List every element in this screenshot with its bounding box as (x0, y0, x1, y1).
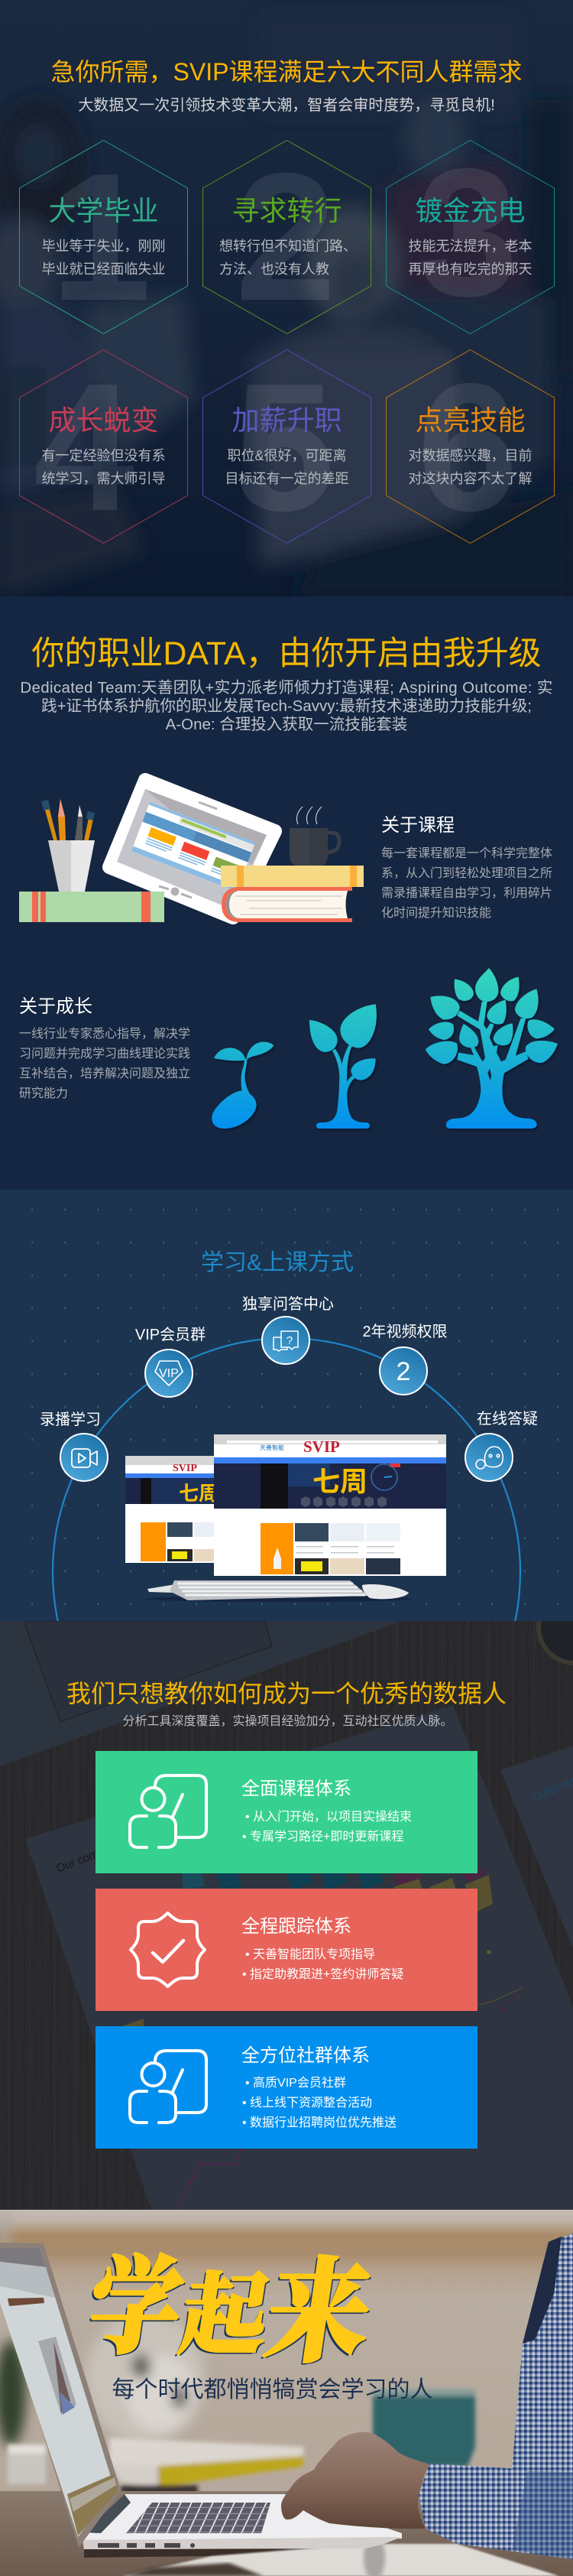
hexagon description (408, 239, 532, 277)
hexagon: career change (202, 140, 371, 334)
card: curriculum (96, 1751, 478, 1873)
card bullets (242, 1947, 403, 1981)
hexagon description: 对数据感兴趣，目前 (408, 448, 532, 463)
hexagon: graduate (19, 140, 188, 334)
card bullets (242, 2076, 397, 2129)
icon: front browser window: SVIP (303, 1437, 340, 1456)
hexagon description: 对这块内容不太了解 (408, 471, 532, 486)
icon: Q and A: ? (286, 1334, 293, 1347)
hexagon description (225, 448, 348, 486)
icon: front browser window: 七周 (312, 1466, 367, 1497)
ghost numbers 1-6: 3 (417, 132, 518, 334)
icon: VIP diamond (145, 1350, 193, 1397)
hexagon: growth (19, 349, 188, 544)
label: Q and A center: 独享问答中心 (242, 1296, 334, 1313)
heading: 学习&上课方式 (201, 1250, 354, 1275)
icon: back browser window: 七周 (179, 1482, 219, 1505)
hexagon: upskilling (386, 140, 555, 334)
hexagon title: 大学毕业 (48, 195, 159, 226)
hexagon description: 再厚也有吃完的那天 (408, 261, 532, 277)
hexagon description (219, 239, 357, 277)
icon: teacher at board (128, 2049, 208, 2124)
brush title (82, 2250, 379, 2376)
icon: teacher at board (128, 1774, 208, 1849)
card bullets: • 从入门开始，以项目实操结束 (245, 1811, 412, 1824)
brush title: 来 (259, 2251, 379, 2376)
icon: two years (380, 1347, 427, 1395)
card bullets: • 天善智能团队专项指导 (245, 1948, 375, 1961)
panel: career data (0, 596, 573, 1190)
heading: 我们只想教你如何成为一个优秀的数据人 (66, 1680, 507, 1707)
label: about course: 关于课程 (381, 815, 455, 836)
hexagon description: 毕业等于失业，刚刚 (41, 239, 165, 254)
dotted background and arc (31, 1208, 558, 1621)
icon: front browser window (214, 1434, 446, 1576)
hexagon title: 成长蜕变 (48, 404, 159, 436)
hexagon title: 镀金充电 (415, 195, 526, 226)
hand (281, 2432, 429, 2529)
card bullets: • 专属学习路径+即时更新课程 (242, 1830, 403, 1843)
brush title: 起 (174, 2268, 275, 2366)
ghost numbers 1-6: 6 (417, 346, 518, 549)
chart: browser mockups with keyboard (125, 1434, 446, 1602)
hexagon title: 加薪升职 (231, 404, 342, 436)
card: community (96, 2026, 478, 2149)
icon: front browser window: 天善智能 (260, 1444, 284, 1451)
text: about course: 系，从入门到轻松处理项目之所 (381, 867, 552, 880)
background photo: desk with reports: Our comp (54, 1845, 106, 1876)
icon: coffee cup (290, 807, 339, 866)
text: about growth (19, 1027, 190, 1100)
icon: keyboard and mouse (145, 1580, 413, 1602)
hexagon description: 想转行但不知道门路、 (219, 239, 357, 254)
text: about growth: 一线行业专家悉心指导，解决学 (19, 1028, 190, 1041)
icon: online chat (465, 1434, 513, 1481)
ghost numbers 1-6: 5 (234, 346, 335, 549)
icon: back browser window: SVIP (173, 1463, 197, 1474)
wall objects (0, 2210, 205, 2447)
icon: two years: 2 (397, 1357, 410, 1386)
hexagon title: 点亮技能 (415, 404, 526, 436)
card title: 全程跟踪体系 (241, 1916, 351, 1937)
label: VIP group: VIP会员群 (135, 1327, 206, 1343)
icon: tablet (109, 780, 275, 918)
subheading: 分析工具深度覆盖，实操项目经验加分，互动社区优质人脉。 (122, 1715, 452, 1728)
hexagon description: 方法、也没有人教 (219, 261, 329, 277)
panel: learning methods (0, 1190, 573, 1621)
hexagon description: 目标还有一定的差距 (225, 471, 348, 486)
intro text: A-One: 合理投入获取一流技能套装 (166, 716, 407, 733)
label: online: 在线答疑 (477, 1411, 538, 1428)
hexagon: skill up (386, 349, 555, 544)
icon: seedling (212, 1042, 274, 1129)
text: about course: 化时间提升知识技能 (381, 907, 491, 920)
card title: 全面课程体系 (241, 1779, 351, 1799)
card bullets: • 指定助教跟进+签约讲师答疑 (242, 1968, 403, 1981)
panel: six audience needs (0, 15, 573, 596)
label: about growth: 关于成长 (19, 996, 92, 1017)
icon: VIP diamond: VIP (159, 1367, 179, 1380)
card bullets: • 线上线下资源整合活动 (242, 2097, 372, 2110)
background photo: person typing on laptop (0, 2210, 573, 2576)
hexagon description: 统学习，需大师引导 (41, 471, 165, 486)
text: about course (381, 846, 552, 920)
label: recorded: 录播学习 (40, 1411, 101, 1428)
sleeve (419, 2464, 573, 2559)
text: about growth: 研究能力 (19, 1087, 68, 1100)
intro text: 践+证书体系护航你的职业发展Tech-Savvy:最新技术速递助力技能升级; (41, 697, 532, 715)
text: about course: 每一套课程都是一个科学完整体 (381, 847, 552, 860)
shirt (512, 2233, 573, 2477)
hexagon description (41, 239, 165, 277)
icon: stacked books (221, 866, 364, 922)
table (0, 2491, 573, 2576)
paper and shadow (84, 2544, 367, 2558)
card bullets: • 数据行业招聘岗位优先推送 (242, 2116, 397, 2129)
icon: young plant (309, 1004, 377, 1129)
hexagon description: 职位&很好，可距离 (227, 448, 347, 463)
subheading: 大数据又一次引领技术变革大潮，智者会审时度势，寻觅良机! (78, 97, 495, 114)
text: about growth: 互补结合，培养解决问题及独立 (19, 1067, 190, 1080)
intro text: Dedicated Team:天善团队+实力派老师倾力打造课程; Aspiring Outcome: 实 (20, 679, 553, 697)
card title: 全方位社群体系 (241, 2045, 370, 2066)
text: about growth: 习问题并完成学习曲线理论实践 (19, 1048, 190, 1061)
icon: back browser window (125, 1456, 219, 1563)
card bullets (242, 1810, 412, 1843)
hexagon description: 毕业就已经面临失业 (41, 261, 165, 277)
icon: pencils and holder (41, 799, 95, 892)
background photo: team in meeting (0, 15, 573, 596)
hexagon title: 寻求转行 (231, 195, 342, 226)
intro text (20, 679, 553, 733)
icon: Q and A (262, 1317, 309, 1364)
icon: green book (19, 892, 164, 922)
label: two year access: 2年视频权限 (362, 1324, 448, 1340)
background photo: desk with reports (0, 1621, 573, 2210)
panel: start learning (0, 2210, 573, 2576)
heading: 急你所需，SVIP课程满足六大不同人群需求 (51, 58, 522, 86)
panel: become a data professional (0, 1621, 573, 2210)
heading: 你的职业DATA，由你开启由我升级 (31, 635, 542, 672)
icon: check badge (128, 1912, 206, 1988)
ghost numbers 1-6: 1 (50, 136, 151, 339)
text: about course: 需录播课程自由学习，利用碎片 (381, 887, 552, 900)
hexagon description: 有一定经验但没有系 (41, 448, 165, 463)
hexagon description: 技能无法提升，老本 (408, 239, 532, 254)
brush title: 学 (82, 2250, 189, 2366)
ghost numbers 1-6: 2 (235, 136, 336, 339)
illustration: three stages of plant growth (212, 968, 559, 1130)
hexagon: promotion (202, 349, 371, 544)
hexagon description (41, 448, 165, 486)
illustration: tablet, books, pencils and coffee (19, 773, 364, 924)
icon: recorded video (60, 1434, 108, 1481)
laptop lid (0, 2243, 121, 2548)
card bullets: • 高质VIP会员社群 (245, 2077, 346, 2090)
ghost numbers 1-6: 4 (34, 346, 134, 549)
ghost numbers 1-6 (34, 132, 518, 549)
card: tracking (96, 1889, 478, 2011)
laptop base (83, 2494, 402, 2540)
icon: full tree (426, 968, 558, 1129)
hexagon description (408, 448, 532, 486)
tagline: 每个时代都悄悄犒赏会学习的人 (112, 2377, 432, 2402)
